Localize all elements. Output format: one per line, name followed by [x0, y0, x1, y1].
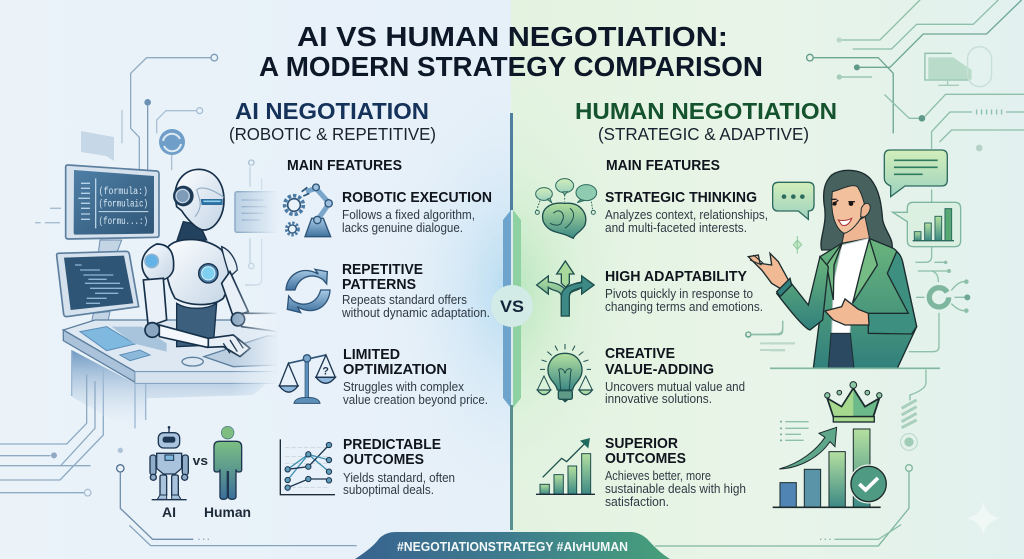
feature: robotic execution: Follows a fixed algorithm,: [342, 207, 475, 222]
title: A MODERN STRATEGY COMPARISON: [259, 51, 763, 82]
feature: creative value-adding: [537, 344, 745, 406]
center divider with VS badge: VS: [500, 297, 524, 316]
woman presenter illustration: [770, 170, 940, 368]
feature: superior outcomes: [536, 435, 746, 509]
AI subheading: (ROBOTIC & REPETITIVE): [229, 124, 436, 144]
feature: high adaptability: [537, 261, 763, 316]
woman raised hand: [746, 253, 795, 350]
feature: repetitive patterns: PATTERNS: [342, 276, 416, 293]
bubble: ellipsis: [773, 182, 814, 219]
feature: limited optimization: [279, 346, 488, 407]
crown and bar chart illustration: [773, 382, 888, 507]
feature: strategic thinking: and multi-faceted interests.: [605, 220, 747, 235]
circuit lines: behind woman: [770, 190, 970, 352]
feature: repetitive patterns: [286, 261, 490, 320]
mini AI vs human graphic: vs: [193, 454, 208, 468]
bubble: bar chart: [893, 202, 961, 247]
icon: scales with question mark: ?: [322, 366, 329, 378]
feature: repetitive patterns: without dynamic adaptation.: [341, 305, 490, 320]
mini AI vs human graphic: [150, 426, 242, 500]
monitor two: [57, 251, 139, 327]
feature: creative value-adding: innovative solutions.: [605, 391, 712, 406]
circuit lines: bottom right: [655, 370, 1000, 546]
feature: predictable outcomes: PREDICTABLE: [343, 436, 441, 453]
icon: scales with question mark: [279, 355, 335, 403]
bars: [773, 429, 881, 507]
feature: predictable outcomes: OUTCOMES: [343, 451, 424, 468]
feature: limited optimization: LIMITED: [343, 346, 400, 363]
feature: creative value-adding: VALUE-ADDING: [605, 361, 714, 378]
feature: predictable outcomes: suboptimal deals.: [343, 482, 434, 497]
icon: line chart: [280, 439, 335, 495]
circuit lines: top right: [807, 0, 1024, 151]
feature: limited optimization: Struggles with complex: [343, 379, 464, 394]
center divider with VS badge: [491, 113, 533, 530]
robot at desk illustration: [35, 155, 277, 327]
feature: limited optimization: value creation beyond price.: [343, 392, 488, 407]
panel: human negotiation: [535, 98, 837, 509]
footer hashtag banner: #NEGOTIATIONSTRATEGY #AIvHUMAN: [397, 539, 628, 554]
check badge: [849, 464, 888, 504]
monitor one: (formulaic): [99, 199, 148, 211]
circuit lines: human side: [746, 332, 780, 337]
feature: limited optimization: OPTIMIZATION: [343, 361, 447, 378]
AI heading: AI NEGOTIATION: [235, 98, 429, 124]
feature: repetitive patterns: REPETITIVE: [342, 261, 423, 278]
speech bubbles and chart bubble: [773, 150, 961, 247]
icon: lightbulb with scales: [537, 344, 592, 403]
feature: predictable outcomes: [280, 436, 455, 497]
monitor one: [66, 165, 159, 253]
feature: strategic thinking: STRATEGIC THINKING: [605, 189, 757, 206]
human silhouette: [214, 426, 242, 499]
feature: superior outcomes: OUTCOMES: [605, 450, 686, 467]
chat bubble icon: [81, 131, 114, 161]
feature: superior outcomes: sustainable deals with high: [605, 481, 746, 496]
footer hashtag banner: [355, 532, 670, 559]
feature: robotic execution: lacks genuine dialogue.: [342, 220, 463, 235]
main features heading: MAIN FEATURES: [606, 157, 720, 174]
mini robot: [150, 426, 188, 500]
blazer body: [813, 238, 917, 368]
icon: branching arrows: [537, 261, 594, 316]
icon: gears and robot arm: [285, 184, 332, 237]
circuit lines: top left: [122, 54, 218, 213]
circuit lines: bottom left: [0, 375, 357, 546]
feature: strategic thinking: [535, 179, 768, 238]
sync circle icon: [159, 129, 185, 155]
crown: [825, 382, 882, 422]
feature: high adaptability: HIGH ADAPTABILITY: [605, 268, 747, 285]
feature: high adaptability: changing terms and emotions.: [605, 299, 763, 314]
feature: creative value-adding: CREATIVE: [605, 345, 675, 362]
feature: creative value-adding: Uncovers mutual value and: [605, 379, 745, 394]
feature: strategic thinking: Analyzes context, relationships,: [605, 207, 768, 222]
feature: high adaptability: Pivots quickly in response to: [605, 286, 753, 301]
robot: [142, 169, 278, 357]
feature: superior outcomes: SUPERIOR: [605, 435, 678, 452]
monitor one: (formula:): [99, 186, 148, 198]
human heading: HUMAN NEGOTIATION: [575, 98, 837, 124]
human subheading: (STRATEGIC & ADAPTIVE): [598, 124, 809, 144]
panel: AI negotiation: [229, 98, 492, 497]
label: AI: AI: [162, 504, 176, 520]
icon: brain with speech bubbles: [535, 179, 597, 238]
label: Human: Human: [204, 504, 251, 520]
feature: repetitive patterns: Repeats standard offers: [342, 292, 467, 307]
main features heading: MAIN FEATURES: [287, 157, 402, 174]
feature: superior outcomes: Achieves better, more: [605, 468, 711, 483]
icon: donut gauge: [929, 288, 949, 307]
fade over robot edge: [232, 165, 290, 397]
desk: [63, 320, 277, 430]
title: [259, 21, 763, 82]
monitor one: (formu...:): [99, 216, 148, 228]
bubble: text lines: [884, 150, 947, 197]
feature: robotic execution: [285, 184, 492, 237]
title: AI VS HUMAN NEGOTIATION:: [297, 21, 728, 52]
feature: predictable outcomes: Yields standard, often: [343, 470, 455, 485]
feature: robotic execution: ROBOTIC EXECUTION: [342, 189, 492, 206]
feature: superior outcomes: satisfaction.: [605, 494, 669, 509]
icon: cycle arrows: [286, 269, 330, 313]
icon: rising bar chart: [536, 438, 595, 494]
